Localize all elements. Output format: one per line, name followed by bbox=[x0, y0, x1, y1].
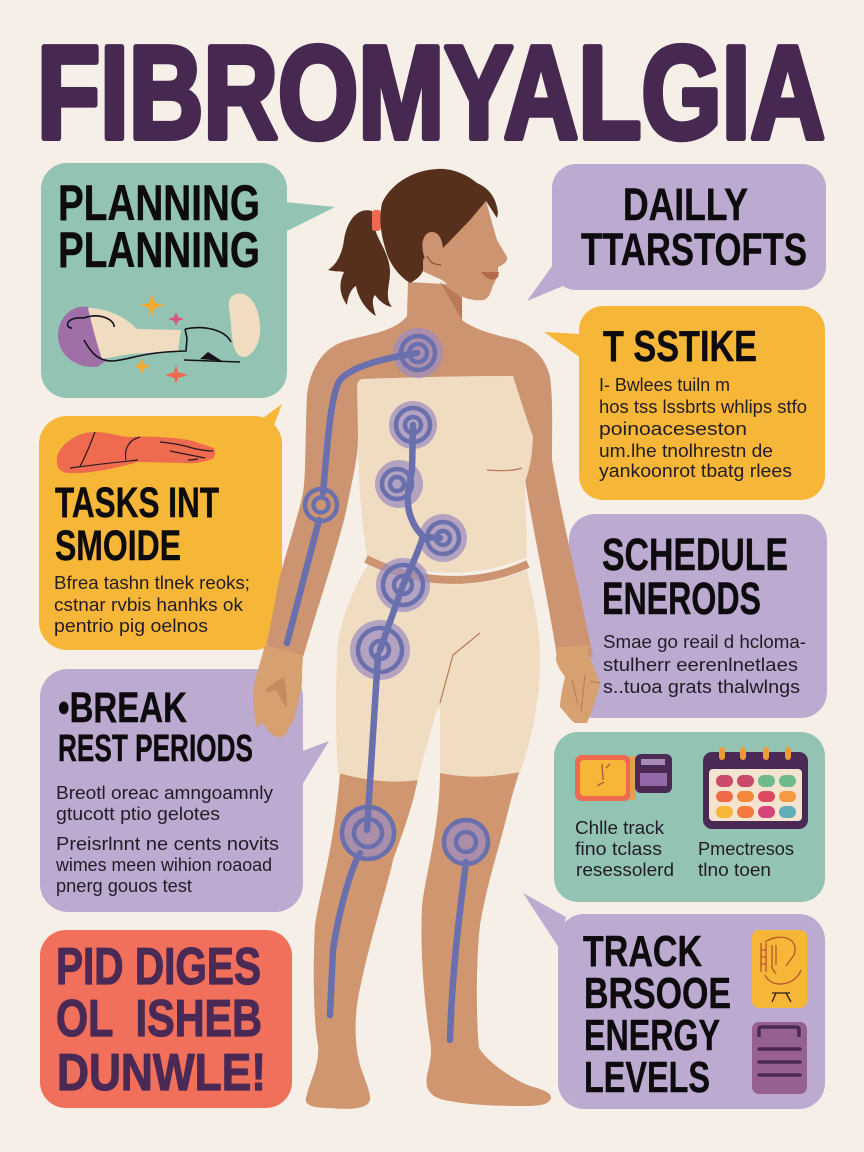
text: strike body: hos tss lssbrts whlips stfo bbox=[599, 397, 807, 417]
text: right caption bbox=[698, 839, 794, 880]
nerve lines bbox=[287, 353, 466, 1040]
heading: planning bbox=[58, 175, 260, 278]
heading: daily: DAILLY bbox=[623, 179, 748, 230]
speech bubble: planning bbox=[41, 163, 335, 398]
heading: tasks bbox=[55, 479, 219, 570]
text: break body: gtucott ptio gelotes bbox=[56, 804, 220, 824]
heading: tasks: SMOIDE bbox=[55, 522, 181, 570]
text: break body: Breotl oreac amngoamnly bbox=[56, 783, 273, 803]
heading: daily bbox=[581, 179, 807, 275]
panel: energy levels bbox=[523, 893, 825, 1109]
heading: schedule: ENERODS bbox=[602, 573, 761, 624]
text: schedule body: s..tuoa grats thalwlngs bbox=[603, 677, 800, 697]
waistband bbox=[366, 559, 528, 580]
heading: energy levels: LEVELS bbox=[584, 1053, 710, 1102]
text: break body: wimes meen wihion roaoad bbox=[55, 855, 272, 875]
heading: energy levels: ENERGY bbox=[584, 1011, 720, 1060]
icon: calendar bbox=[703, 747, 808, 829]
heading: red callout bbox=[56, 938, 266, 1102]
heading: break bbox=[58, 684, 253, 770]
pain points halos bbox=[341, 328, 488, 864]
heading: red callout: PID DIGES bbox=[56, 938, 261, 996]
text: left caption: Chlle track bbox=[575, 818, 665, 838]
text: schedule body: Smae go reail d hcloma- bbox=[603, 632, 806, 652]
bubble: track tools bbox=[554, 732, 825, 902]
text: left caption bbox=[575, 818, 674, 880]
heading: red callout: OL ISHEB bbox=[56, 990, 262, 1048]
figure: woman with pain pathways bbox=[253, 169, 600, 1109]
ponytail bbox=[328, 210, 392, 316]
panel: red callout bbox=[40, 930, 292, 1108]
speech bubble: strike bbox=[544, 306, 825, 500]
panel: schedule bbox=[569, 514, 827, 718]
heading: strike: T SSTIKE bbox=[603, 322, 757, 371]
heading: schedule bbox=[602, 529, 788, 624]
speech bubble: break bbox=[40, 669, 329, 912]
heading: schedule: SCHEDULE bbox=[602, 529, 788, 580]
heading: planning: PLANNING bbox=[58, 175, 260, 231]
bubble: schedule bbox=[569, 514, 827, 718]
left hand bbox=[253, 645, 303, 737]
text: strike body: um.lhe tnolhrestn de bbox=[599, 441, 773, 461]
text: strike body: I- Bwlees tuiln m bbox=[599, 375, 730, 395]
text: schedule body: stulherr eerenlnetlaes bbox=[603, 655, 798, 675]
body: legs bbox=[306, 770, 551, 1109]
heading: energy levels: TRACK bbox=[583, 927, 702, 976]
text: tasks body: Bfrea tashn tlnek reoks; bbox=[54, 573, 250, 593]
text: tasks body bbox=[54, 573, 250, 636]
speech bubble: tasks bbox=[39, 404, 282, 650]
panel: strike bbox=[544, 306, 825, 500]
text: right caption: Pmectresos bbox=[698, 839, 794, 859]
shorts seams bbox=[440, 468, 522, 703]
heading: planning: PLANNING bbox=[58, 222, 260, 278]
bubble: red callout bbox=[40, 930, 292, 1108]
speech bubble: energy levels bbox=[523, 893, 825, 1109]
heading: break: REST PERIODS bbox=[58, 728, 253, 770]
head bbox=[380, 169, 507, 300]
text: strike body: poinoaceseston bbox=[599, 419, 747, 439]
text: left caption: resessolerd bbox=[576, 860, 674, 880]
panel: break bbox=[40, 669, 329, 912]
heading: tasks: TASKS INT bbox=[55, 479, 219, 527]
text: left caption: fino tclass bbox=[575, 839, 662, 859]
icon: arm bbox=[57, 432, 215, 473]
text: strike body bbox=[599, 375, 807, 481]
text: break body: Preisrlnnt ne cents novits bbox=[56, 834, 279, 854]
icon: yellow chart card bbox=[752, 930, 807, 1008]
heading: energy levels bbox=[583, 927, 731, 1102]
top garment bbox=[357, 376, 533, 573]
pain point rings bbox=[305, 336, 488, 864]
text: schedule body bbox=[603, 632, 806, 697]
shorts bbox=[336, 565, 540, 782]
panel: tasks bbox=[39, 404, 282, 650]
body: torso and arms bbox=[265, 282, 593, 657]
text: break body bbox=[55, 783, 279, 896]
heading: break: •BREAK bbox=[58, 684, 187, 732]
heading: red callout: DUNWLE! bbox=[57, 1044, 266, 1102]
heading: energy levels: BRSOOE bbox=[584, 969, 731, 1018]
text: right caption: tlno toen bbox=[698, 860, 771, 880]
text: tasks body: cstnar rvbis hanhks ok bbox=[54, 595, 244, 615]
right hand bbox=[556, 645, 600, 723]
panel: planning bbox=[41, 163, 335, 398]
panel: track tools bbox=[554, 732, 825, 902]
text: break body: pnerg gouos test bbox=[56, 876, 192, 896]
icon: resting on pillow bbox=[58, 294, 260, 384]
panel: daily bbox=[527, 164, 826, 301]
neck shadow bbox=[440, 282, 462, 320]
speech bubble: daily bbox=[527, 164, 826, 301]
icon: purple list card bbox=[752, 1022, 807, 1094]
text: tasks body: pentrio pig oelnos bbox=[54, 616, 208, 636]
icon: tracker card bbox=[575, 754, 672, 801]
text: strike body: yankoonrot tbatg rlees bbox=[599, 461, 792, 481]
